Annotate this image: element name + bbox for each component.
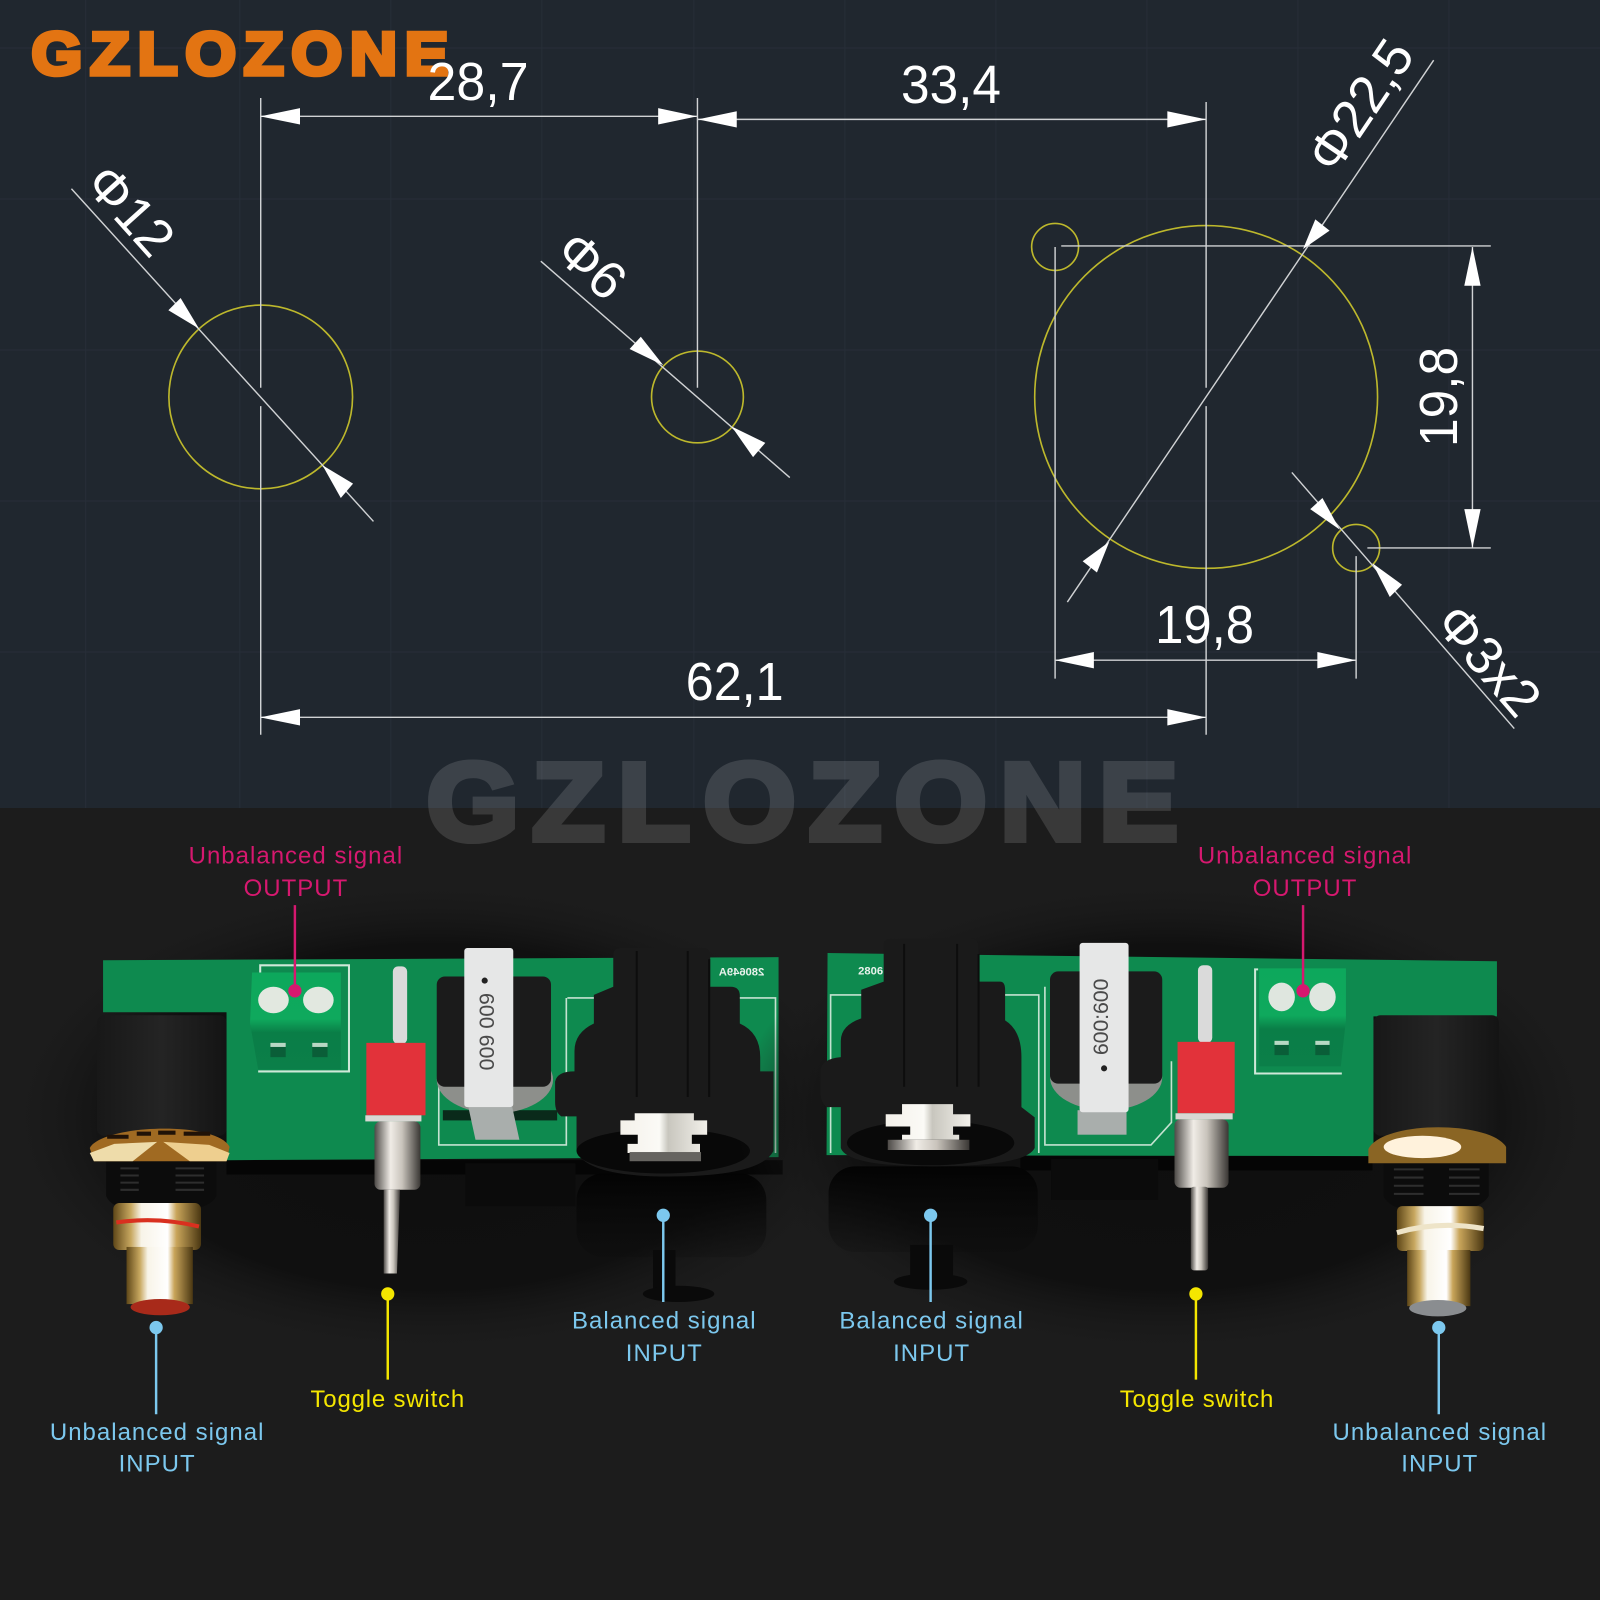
dimension values: 19,8 xyxy=(1409,347,1469,447)
dark shadow halo xyxy=(0,878,867,1357)
PCB xyxy=(827,953,1497,1156)
callouts: signal inputs xyxy=(50,1209,1547,1477)
PCB xyxy=(103,957,779,1160)
PCB marking: 280649A xyxy=(719,967,764,979)
dimension values xyxy=(74,29,1552,728)
label: right unbalanced input: INPUT xyxy=(1401,1450,1478,1477)
callouts: unbalanced output xyxy=(189,842,1412,997)
leader: left toggle xyxy=(387,1294,389,1380)
label: right output: Unbalanced signal xyxy=(1198,842,1412,869)
transformer: 600:600 xyxy=(1089,978,1113,1055)
label: right output: OUTPUT xyxy=(1253,875,1357,902)
leader: left unbalanced input xyxy=(155,1328,157,1414)
dot: right output xyxy=(1296,984,1310,997)
leader: right toggle xyxy=(1195,1294,1197,1380)
leader: left output xyxy=(294,905,296,991)
label: left output: Unbalanced signal xyxy=(189,842,403,869)
label: right toggle: Toggle switch xyxy=(1120,1386,1274,1413)
dimension values: 62,1 xyxy=(686,652,784,712)
dark shadow halo xyxy=(735,878,1600,1357)
dot: right balanced input xyxy=(924,1209,937,1222)
extension and dimension lines xyxy=(71,60,1514,735)
dimension values: Φ22,5 xyxy=(1296,29,1426,182)
transformer xyxy=(437,948,557,1140)
label: left toggle: Toggle switch xyxy=(311,1386,465,1413)
label: left balanced input: INPUT xyxy=(626,1340,703,1367)
label: left unbalanced input: INPUT xyxy=(119,1450,196,1477)
drawing panel background xyxy=(0,0,1600,808)
dimension values: 19,8 xyxy=(1155,595,1254,655)
leader: right output xyxy=(1302,905,1304,991)
dot: left output xyxy=(288,984,302,997)
dot: right toggle xyxy=(1189,1287,1203,1301)
toggle switch xyxy=(365,966,426,1273)
PCB marking: 2806 xyxy=(858,965,883,977)
label: right balanced input: INPUT xyxy=(893,1340,970,1367)
right circuit board xyxy=(735,878,1600,1357)
label: left unbalanced input: Unbalanced signal xyxy=(50,1419,264,1446)
label: left output: OUTPUT xyxy=(244,875,348,902)
label: left balanced input: Balanced signal xyxy=(572,1308,757,1335)
dot: left balanced input xyxy=(657,1209,670,1222)
label: right unbalanced input: Unbalanced signal xyxy=(1333,1419,1547,1446)
dimension values: Φ12 xyxy=(74,153,186,268)
leader: right balanced input xyxy=(929,1215,932,1302)
watermark: GZLOZONE xyxy=(427,741,1178,864)
photo panel background xyxy=(0,808,1600,1600)
terminal block xyxy=(250,965,349,1071)
toggle switch xyxy=(1174,965,1235,1270)
dimension values: Φ6 xyxy=(545,220,638,312)
leader: right unbalanced input xyxy=(1438,1328,1440,1414)
dimension values: Φ3x2 xyxy=(1424,593,1552,728)
leader: left balanced input xyxy=(662,1215,664,1302)
dot: left toggle xyxy=(381,1287,394,1301)
board and under-board shadows xyxy=(829,1156,1372,1290)
callouts: toggle switches xyxy=(311,1287,1274,1413)
hole circles xyxy=(169,223,1380,571)
transformer xyxy=(1050,943,1162,1135)
dot: left unbalanced input xyxy=(149,1321,163,1334)
dot: right unbalanced input xyxy=(1432,1321,1445,1334)
technical drawing: hole dimensions xyxy=(71,29,1552,735)
board and under-board shadows xyxy=(227,1160,783,1302)
RCA connector xyxy=(1368,1015,1506,1316)
XLR connector xyxy=(820,939,1035,1166)
dimension arrowheads xyxy=(168,108,1481,726)
left circuit board xyxy=(0,878,867,1357)
label: right balanced input: Balanced signal xyxy=(839,1308,1024,1335)
XLR connector xyxy=(555,948,773,1177)
brand logo: GZLOZONE xyxy=(32,21,448,88)
dimension values: 28,7 xyxy=(428,52,529,112)
dimension values: 33,4 xyxy=(901,55,1001,115)
terminal block xyxy=(1255,968,1346,1073)
transformer: 600 600 xyxy=(475,993,499,1071)
RCA connector xyxy=(90,1015,230,1315)
